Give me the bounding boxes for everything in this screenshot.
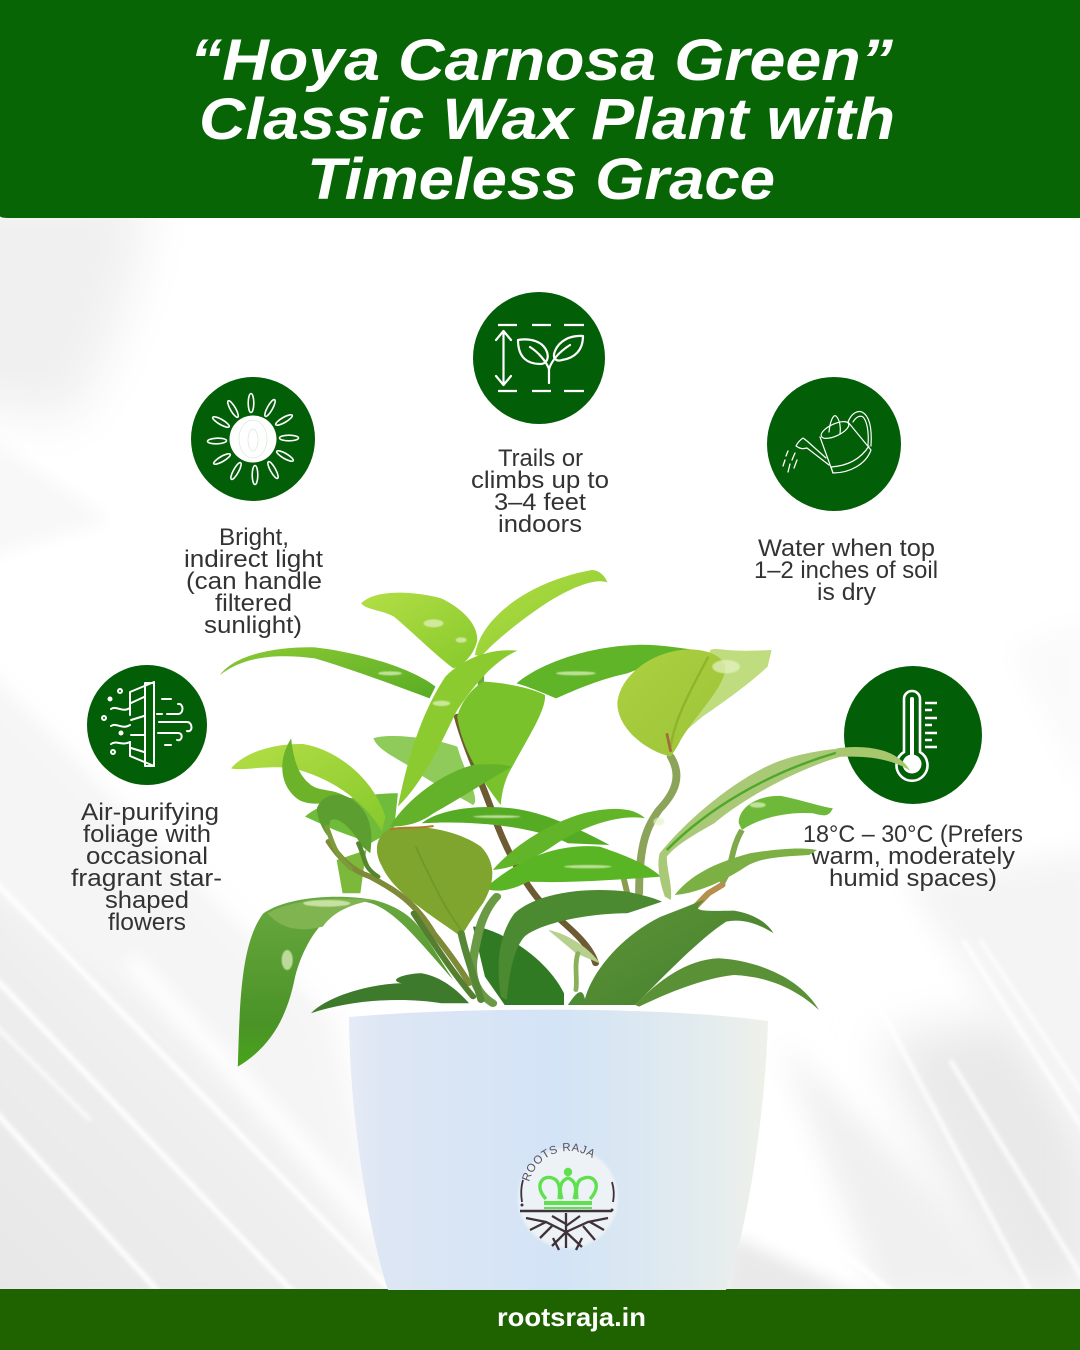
icon: plant height — [473, 292, 605, 424]
roots — [520, 1211, 612, 1250]
icon: sun — [191, 377, 315, 501]
text: light: sunlight) — [204, 612, 302, 639]
text: air purifying: occasional — [86, 843, 208, 870]
text: temperature: 18°C – 30°C (Prefers — [803, 821, 1023, 848]
title: Timeless Grace — [307, 147, 775, 212]
text: water — [754, 535, 938, 606]
text: temperature: humid spaces) — [829, 865, 997, 892]
text: growth: indoors — [498, 511, 582, 538]
lower leaves — [238, 897, 453, 1067]
text: air purifying: Air-purifying — [81, 799, 219, 826]
text: temperature: warm, moderately — [810, 843, 1016, 870]
icon: air purifying — [87, 665, 207, 785]
text: air purifying: flowers — [108, 909, 186, 936]
text: growth — [471, 445, 609, 538]
crown — [540, 1170, 596, 1208]
water highlights — [282, 619, 766, 970]
pot — [349, 1010, 768, 1290]
text: temperature — [803, 821, 1023, 892]
text: air purifying: fragrant star- — [71, 865, 222, 892]
icon: watering can — [767, 377, 901, 511]
title: “Hoya Carnosa Green” — [190, 28, 893, 93]
branch — [327, 827, 578, 1003]
icon: thermometer — [844, 666, 982, 804]
upper leaves — [475, 570, 607, 657]
text: water: 1–2 inches of soil — [754, 557, 938, 584]
logo sticker: ROOTS RAJA — [522, 1143, 594, 1182]
text: light: (can handle — [186, 568, 322, 595]
text: water: is dry — [817, 579, 877, 606]
text: light — [184, 524, 323, 639]
heart leaf — [377, 827, 492, 937]
text: air purifying: foliage with — [83, 821, 211, 848]
text: growth: 3–4 feet — [494, 489, 586, 516]
header banner — [0, 0, 1080, 218]
middle leaves — [231, 744, 385, 832]
website: rootsraja.in — [497, 1302, 646, 1332]
logo sticker — [518, 1143, 618, 1250]
title: Classic Wax Plant with — [199, 87, 895, 152]
stems — [457, 667, 676, 963]
text: air purifying: shaped — [105, 887, 189, 914]
text: growth: Trails or — [498, 445, 583, 472]
back leaves — [373, 736, 475, 805]
text: light: indirect light — [184, 546, 323, 573]
text: growth: climbs up to — [471, 467, 609, 494]
plant — [220, 570, 910, 1067]
text: air purifying — [71, 799, 222, 936]
text: water: Water when top — [758, 535, 935, 562]
text: light: Bright, — [219, 524, 289, 551]
tail leaf over thermometer — [835, 747, 910, 771]
title — [190, 28, 895, 212]
footer bar — [0, 1289, 1080, 1350]
text: light: filtered — [215, 590, 292, 617]
